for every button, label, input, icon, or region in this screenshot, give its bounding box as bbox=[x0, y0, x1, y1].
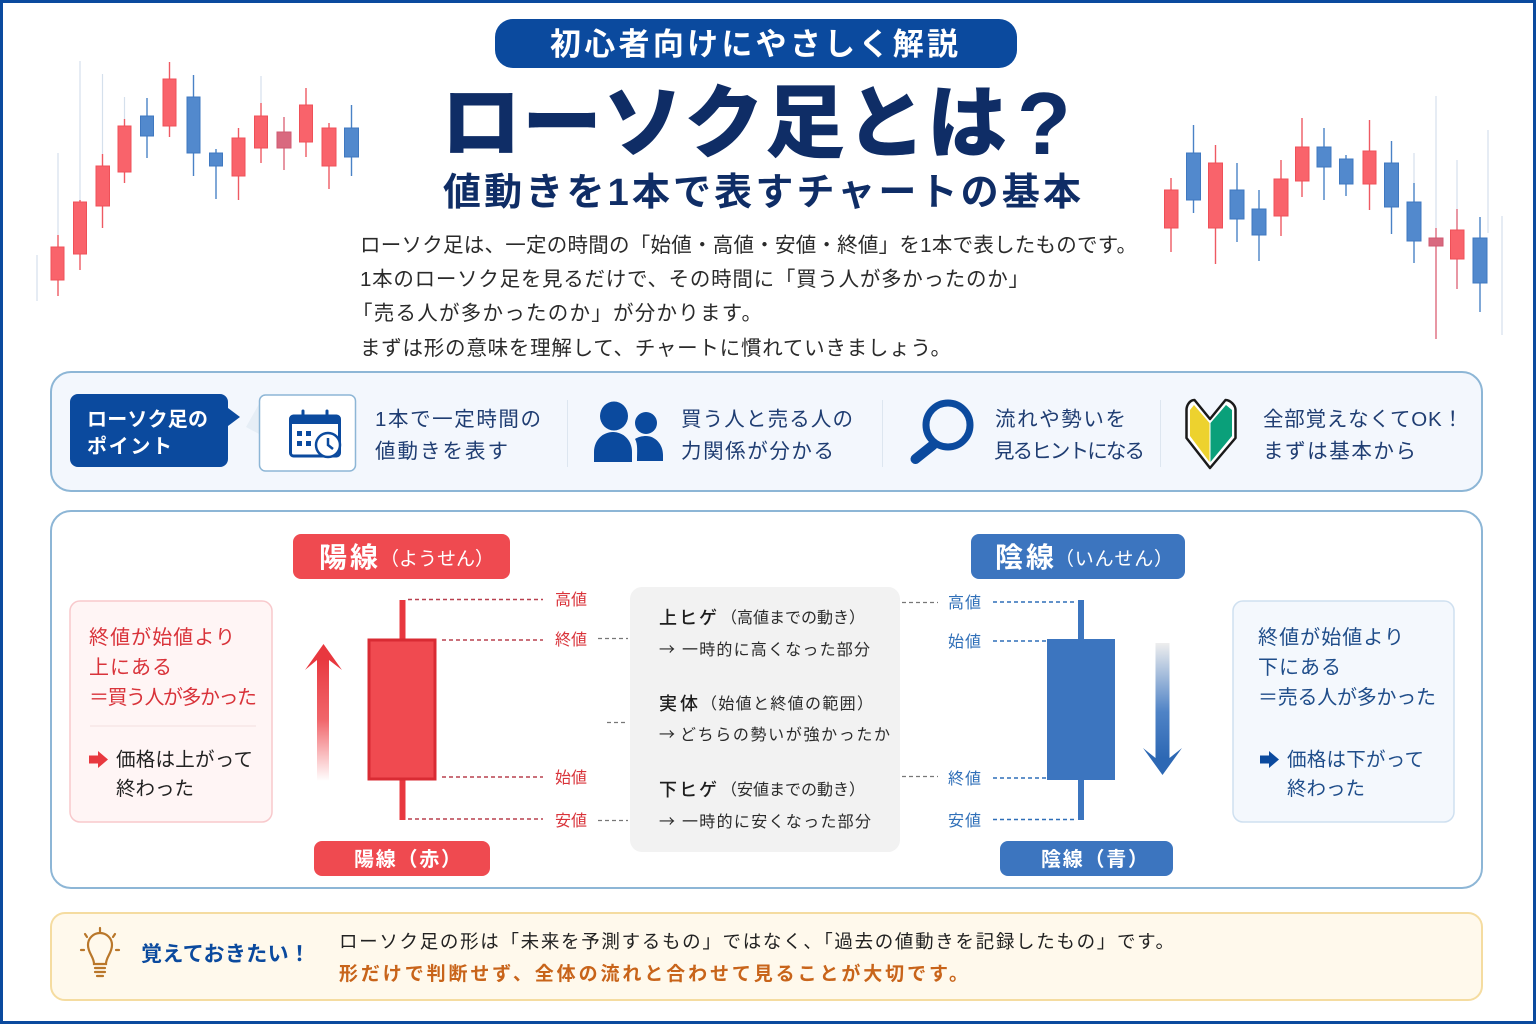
bearish heading: 陰線 bbox=[995, 542, 1054, 573]
lower wick note: 下ヒゲ bbox=[659, 780, 717, 800]
bullish caption bbox=[314, 841, 490, 876]
intro text: ローソク足は、一定の時間の「始値・高値・安値・終値」を1本で表したものです。 bbox=[360, 234, 1137, 257]
panel: key takeaway bbox=[51, 913, 1482, 1000]
real body note: どちらの勢いが強かったか bbox=[680, 726, 890, 744]
upper wick note: → bbox=[659, 636, 675, 660]
bearish explanation box bbox=[1233, 601, 1454, 822]
icon: light bulb bbox=[81, 928, 119, 976]
lower wick note: （安値までの動き） bbox=[721, 781, 865, 799]
bullish candle bbox=[369, 600, 435, 820]
bearish candle bbox=[1047, 600, 1115, 820]
icon: beginner mark bbox=[1186, 400, 1236, 468]
upper wick note bbox=[659, 608, 870, 660]
bearish explanation box: 終値が始値より bbox=[1258, 626, 1404, 649]
icon: red right arrow bbox=[89, 751, 108, 768]
arrow: price up bbox=[305, 644, 342, 781]
lower wick note bbox=[659, 780, 871, 832]
bullish price labels: 安値 bbox=[555, 812, 587, 830]
bullish price labels: 始値 bbox=[555, 769, 587, 787]
point text 4: まずは基本から bbox=[1263, 440, 1416, 463]
point text 2: 買う人と売る人の bbox=[681, 408, 853, 431]
bullish explanation box: 上にある bbox=[89, 656, 172, 679]
subtitle: 値動きを1本で表すチャートの基本 bbox=[443, 172, 1081, 214]
takeaway heading: 覚えておきたい！ bbox=[141, 943, 310, 966]
bullish heading bbox=[293, 534, 510, 579]
bullish explanation box: ＝買う人が多かった bbox=[89, 686, 257, 709]
point label tag bbox=[70, 394, 240, 467]
bearish explanation box: 価格は下がって bbox=[1287, 749, 1424, 771]
bullish heading: 陽線 bbox=[319, 542, 378, 573]
point label tag: ポイント bbox=[87, 435, 172, 458]
arrow: price down bbox=[1143, 643, 1182, 775]
bearish price labels: 安値 bbox=[948, 812, 981, 830]
bullish price labels bbox=[408, 591, 587, 830]
point text 3 bbox=[994, 408, 1145, 463]
title: ローソク足とは bbox=[441, 79, 1007, 168]
intro text bbox=[352, 234, 1137, 360]
real body note: → bbox=[659, 721, 675, 745]
icon: buyers and sellers bbox=[594, 402, 663, 462]
point text 3: 流れや勢いを bbox=[995, 408, 1126, 431]
header pill bbox=[495, 19, 1017, 68]
bearish explanation box: 下にある bbox=[1258, 657, 1341, 679]
point text 3: 見るヒントになる bbox=[994, 440, 1145, 463]
real body note bbox=[659, 694, 890, 745]
takeaway text: ローソク足の形は「未来を予測するもの」ではなく、「過去の値動きを記録したもの」です。 bbox=[339, 931, 1174, 952]
point label tag: ローソク足の bbox=[87, 408, 208, 431]
bearish price labels: 終値 bbox=[948, 770, 981, 788]
point text 2: 力関係が分かる bbox=[681, 440, 834, 463]
lower wick note: → bbox=[659, 808, 675, 832]
center explanation box bbox=[630, 587, 900, 852]
bullish explanation box: 終わった bbox=[116, 778, 194, 800]
title: ? bbox=[1017, 74, 1071, 173]
header pill: 初心者向けにやさしく解説 bbox=[550, 27, 958, 62]
real body note: （始値と終値の範囲） bbox=[701, 695, 873, 713]
intro text: 1本のローソク足を見るだけで、その時間に「買う人が多かったのか」 bbox=[360, 268, 1029, 291]
upper wick note: （高値までの動き） bbox=[721, 609, 865, 627]
takeaway text: 形だけで判断せず、全体の流れと合わせて見ることが大切です。 bbox=[339, 962, 968, 985]
icon: blue right arrow bbox=[1260, 751, 1279, 768]
intro text: 「売る人が多かったのか」が分かります。 bbox=[352, 302, 762, 325]
lower wick note: 一時的に安くなった部分 bbox=[682, 813, 871, 831]
bearish explanation box: 終わった bbox=[1287, 778, 1365, 800]
point text 2 bbox=[681, 408, 853, 463]
bearish caption bbox=[1000, 841, 1173, 876]
takeaway text bbox=[339, 931, 1174, 985]
bullish explanation box: 価格は上がって bbox=[116, 749, 253, 771]
chart: decorative candlesticks right bbox=[1164, 96, 1502, 339]
panel: candlestick diagram bbox=[51, 511, 1482, 888]
icon: calendar and clock bbox=[246, 395, 356, 471]
point text 1: 1本で一定時間の bbox=[375, 408, 541, 431]
bullish price labels: 高値 bbox=[555, 591, 587, 609]
point text 4: 全部覚えなくてOK！ bbox=[1263, 408, 1463, 431]
real body note: 実体 bbox=[659, 694, 698, 714]
bearish heading: （いんせん） bbox=[1055, 548, 1173, 570]
point text 4 bbox=[1263, 408, 1463, 463]
bearish explanation box: ＝売る人が多かった bbox=[1258, 686, 1436, 709]
bearish price labels bbox=[948, 594, 1076, 830]
upper wick note: 一時的に高くなった部分 bbox=[682, 641, 870, 659]
bearish heading bbox=[971, 534, 1185, 579]
bearish price labels: 始値 bbox=[948, 633, 981, 651]
bullish explanation box bbox=[70, 601, 272, 822]
chart: decorative candlesticks left bbox=[37, 61, 358, 301]
bearish caption: 陰線（青） bbox=[1041, 848, 1148, 871]
bullish heading: （ようせん） bbox=[380, 548, 494, 570]
icon: magnifier bbox=[916, 403, 970, 459]
point text 1: 値動きを表す bbox=[375, 440, 508, 463]
bearish price labels: 高値 bbox=[948, 594, 981, 612]
panel: candlestick points bbox=[51, 372, 1482, 491]
bullish explanation box: 終値が始値より bbox=[89, 626, 235, 649]
bullish price labels: 終値 bbox=[555, 631, 587, 649]
upper wick note: 上ヒゲ bbox=[659, 608, 717, 628]
bullish caption: 陽線（赤） bbox=[354, 848, 461, 871]
point text 1 bbox=[375, 408, 541, 463]
intro text: まずは形の意味を理解して、チャートに慣れていきましょう。 bbox=[360, 337, 951, 360]
